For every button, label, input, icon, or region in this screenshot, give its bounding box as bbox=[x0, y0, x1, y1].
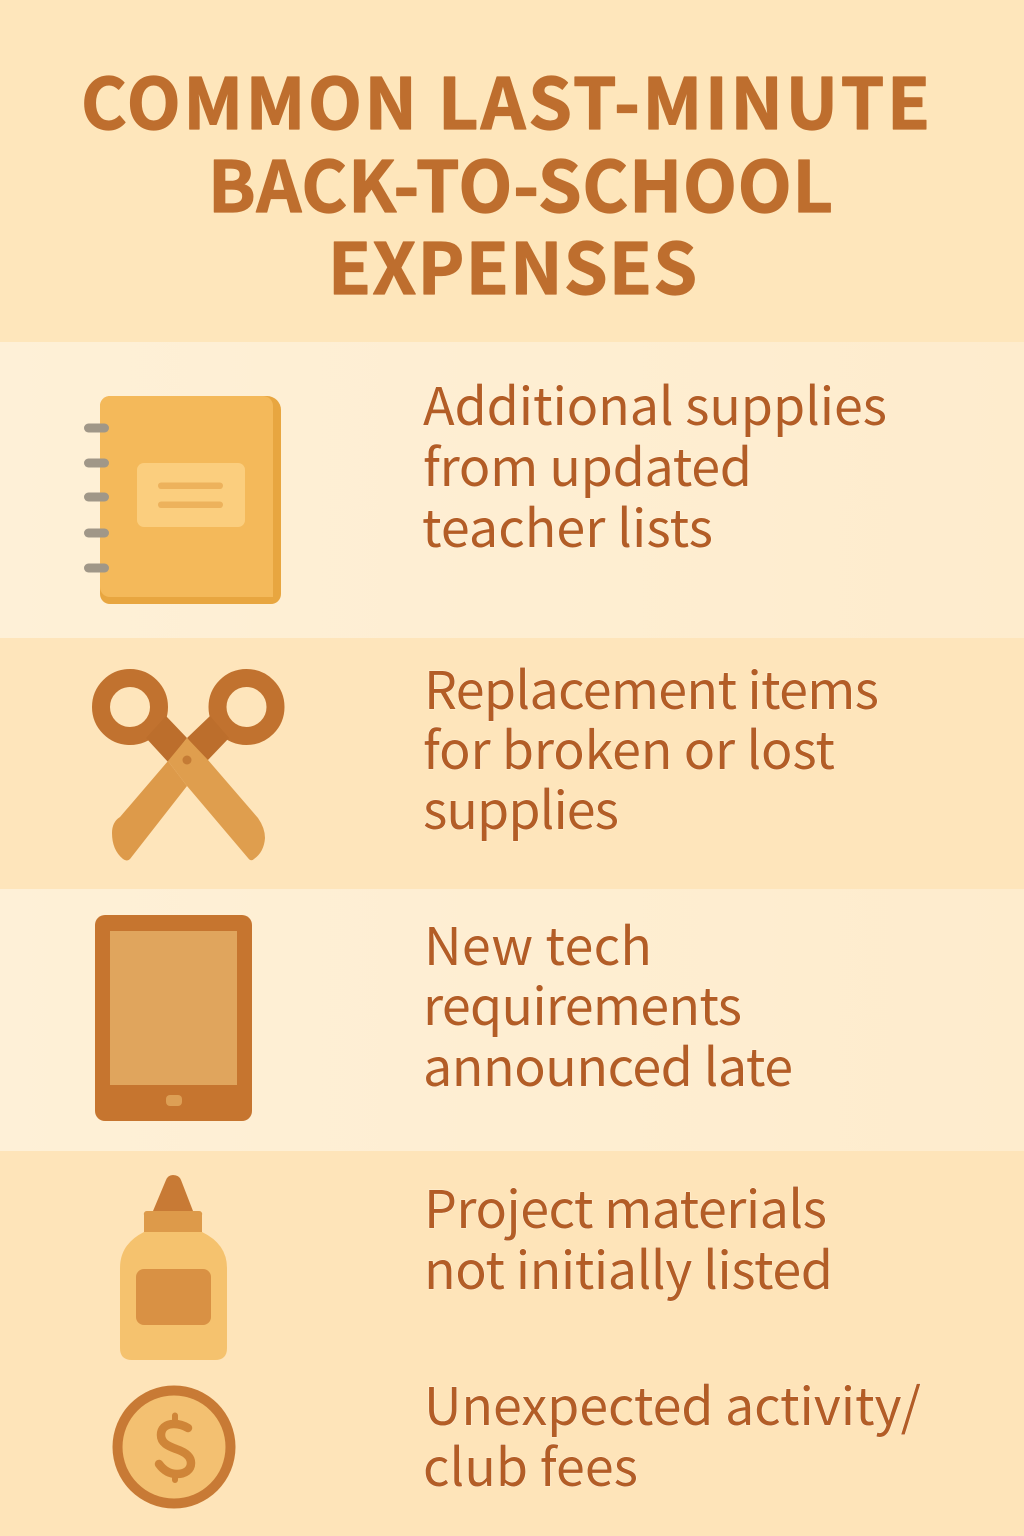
icon: dollar coin bbox=[112, 1386, 236, 1508]
text: activity and club fees: club fees bbox=[423, 1426, 638, 1501]
text: new tech requirements bbox=[423, 905, 793, 1101]
text: new tech requirements: announced late bbox=[423, 1026, 793, 1101]
icon: scissors bbox=[101, 678, 276, 860]
text: project materials: not initially listed bbox=[424, 1229, 833, 1304]
panel: additional supplies bbox=[0, 342, 1024, 638]
text: additional supplies: teacher lists bbox=[422, 487, 713, 562]
text: replacement items bbox=[423, 649, 879, 844]
title bbox=[81, 49, 930, 315]
text: replacement items: Replacement items bbox=[424, 649, 879, 724]
text: project materials: Project materials bbox=[424, 1168, 827, 1243]
panel: replacement items bbox=[0, 638, 1024, 889]
text: replacement items: for broken or lost bbox=[423, 709, 835, 784]
text: replacement items: supplies bbox=[423, 769, 619, 844]
icon: spiral notebook bbox=[84, 396, 281, 604]
title: BACK-TO-SCHOOL bbox=[208, 132, 833, 233]
text: additional supplies bbox=[422, 365, 887, 562]
text: activity and club fees bbox=[423, 1365, 921, 1501]
panel: project materials and activity fees bbox=[0, 1151, 1024, 1536]
text: additional supplies: from updated bbox=[423, 426, 752, 501]
text: new tech requirements: requirements bbox=[423, 965, 742, 1040]
text: new tech requirements: New tech bbox=[424, 905, 652, 980]
text: project materials bbox=[424, 1168, 833, 1304]
text: additional supplies: Additional supplies bbox=[423, 365, 887, 440]
panel: new tech requirements bbox=[0, 889, 1024, 1151]
text: activity and club fees: Unexpected activity/ bbox=[424, 1365, 921, 1440]
panel: title band bbox=[0, 0, 1024, 342]
title: COMMON LAST-MINUTE bbox=[81, 49, 930, 150]
icon: glue bottle bbox=[120, 1175, 227, 1360]
title: EXPENSES bbox=[328, 214, 697, 315]
icon: tablet bbox=[95, 915, 252, 1121]
